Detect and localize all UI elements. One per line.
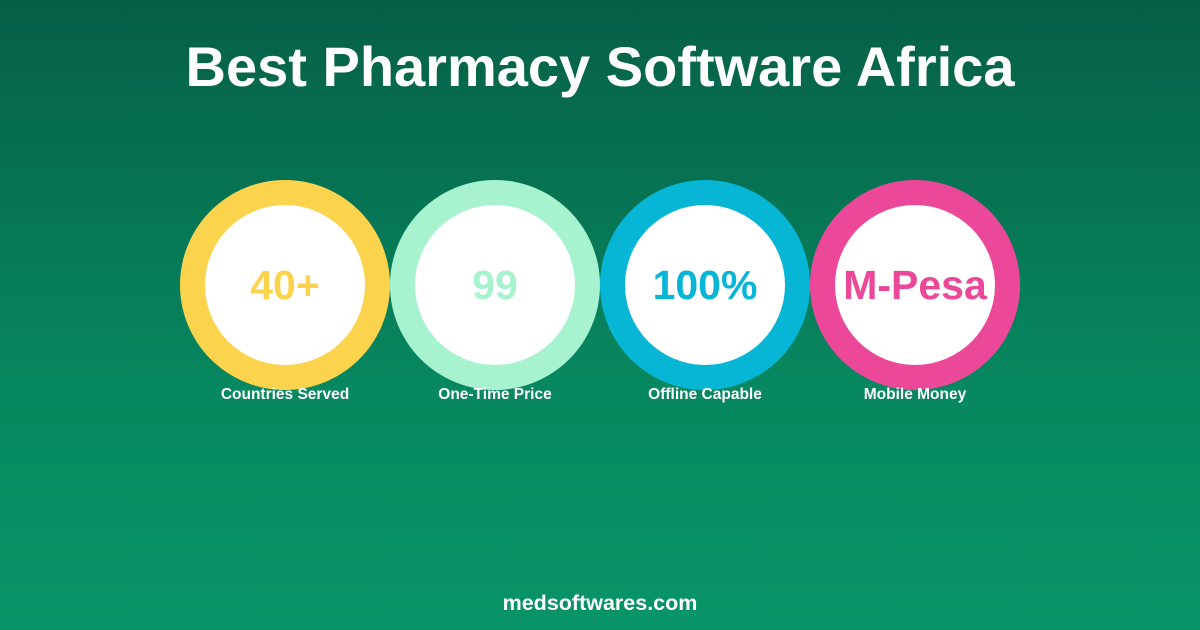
label: offline capable: Offline Capable	[648, 386, 762, 403]
label: one-time price: One-Time Price	[438, 386, 552, 403]
stat: offline capable	[600, 180, 810, 403]
footer url: medsoftwares.com	[503, 591, 697, 615]
value: M-Pesa: M-Pesa	[843, 262, 987, 308]
stat: countries served	[180, 180, 390, 403]
label: mobile money: Mobile Money	[864, 386, 966, 403]
title: Best Pharmacy Software Africa	[186, 35, 1014, 98]
value: M-Pesa	[835, 205, 995, 365]
value: 40+: 40+	[250, 262, 320, 308]
stat: mobile money	[810, 180, 1020, 403]
value: 99	[415, 205, 575, 365]
value: 100%	[625, 205, 785, 365]
stat: one-time price	[390, 180, 600, 403]
label: countries served: Countries Served	[221, 386, 349, 403]
value: 100%: 100%	[653, 262, 757, 308]
value: 40+	[205, 205, 365, 365]
value: 99: 99	[472, 262, 518, 308]
